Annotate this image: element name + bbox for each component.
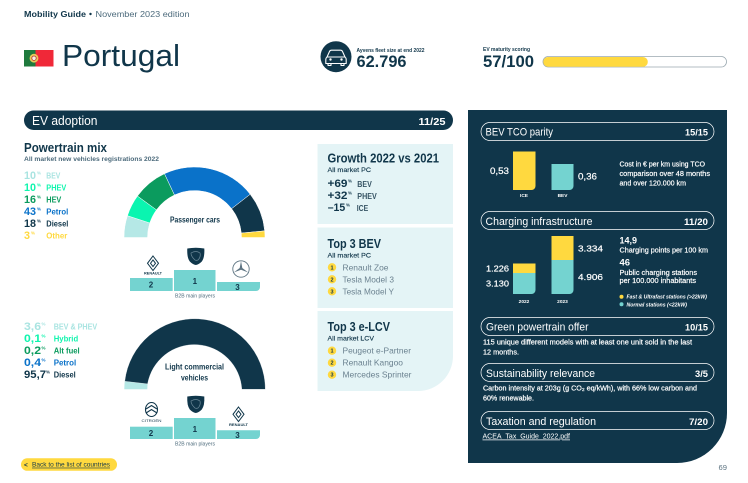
stacked bar chart: charging stations: 1.226 — [486, 264, 509, 274]
fleet size block — [320, 41, 424, 72]
section heading: taxation and regulation: Taxation and regulation — [486, 416, 596, 428]
legend: passenger car powertrain shares — [24, 170, 68, 242]
heading bar: EV adoption — [24, 110, 453, 130]
bar chart: TCO comparison: 0,53 — [490, 166, 509, 176]
section heading: green powertrain offer: 10/15 — [685, 322, 709, 334]
section heading: taxation and regulation: 7/20 — [689, 417, 708, 428]
section heading: green powertrain offer: Green powertrain offer — [486, 322, 589, 334]
section heading: sustainability relevance — [481, 364, 714, 382]
logo: Peugeot — [187, 396, 204, 413]
section heading: charging infrastructure — [481, 212, 714, 230]
scoring label: EV maturity scoring — [483, 47, 530, 53]
logo: Mercedes-Benz — [233, 261, 249, 277]
logo: Renault: RENAULT — [144, 271, 163, 275]
heading bar: EV adoption: 11/25 — [418, 116, 446, 128]
legend: light commercial vehicle powertrain shares: 0,1 — [24, 333, 41, 345]
legend: passenger car powertrain shares: Diesel — [46, 220, 68, 228]
legend: passenger car powertrain shares: % — [37, 182, 41, 188]
panel: growth 2022 vs 2021: All market PC — [328, 167, 371, 174]
growth figures: –15 — [328, 202, 345, 214]
legend: passenger car powertrain shares: BEV — [46, 172, 61, 180]
legend: light commercial vehicle powertrain shares: 3,6 — [24, 321, 41, 333]
heading bar: EV adoption: EV adoption — [32, 113, 98, 128]
ranking list: 2 — [330, 277, 334, 283]
text: green powertrain description — [483, 338, 693, 356]
legend: light commercial vehicle powertrain shares: % — [42, 334, 46, 338]
podium blocks — [130, 418, 260, 439]
ranking list: 1 — [330, 349, 334, 355]
legend: passenger car powertrain shares: 18 — [24, 218, 36, 230]
legend: light commercial vehicle powertrain shares: Petrol — [54, 358, 76, 368]
panel: top 3 BEV: All market PC — [328, 253, 371, 260]
podium ranks: 3 — [235, 431, 240, 440]
stacked bar chart: charging stations: 3.334 — [578, 244, 603, 254]
heading: Powertrain mix: All market new vehicles registrations 2022 — [24, 156, 159, 163]
section heading: taxation and regulation — [481, 412, 714, 430]
ranking list: Renault Zoe — [342, 262, 389, 272]
legend: light commercial vehicle powertrain shares: % — [42, 346, 46, 350]
legend: light commercial vehicle powertrain shares: Diesel — [54, 370, 76, 380]
podium ranks: 3 — [235, 283, 240, 292]
legend: light commercial vehicle powertrain shares: 95,7 — [24, 369, 46, 381]
heading: Powertrain mix — [24, 141, 159, 163]
text: charging figures: 14,9 — [620, 235, 637, 245]
legend: passenger car powertrain shares: % — [37, 170, 41, 176]
growth figures: % — [348, 178, 352, 184]
podium: passenger car B2B players — [130, 248, 260, 300]
growth figures — [328, 178, 377, 214]
ranking list: 1 — [330, 265, 334, 271]
panel: top 3 e-LCV — [318, 311, 453, 391]
chart: passenger cars half donut — [124, 167, 265, 238]
legend: light commercial vehicle powertrain shares: BEV & PHEV — [54, 322, 98, 332]
text: TCO description: Cost in € per km using TCO — [620, 160, 705, 169]
legend: light commercial vehicle powertrain shares: % — [42, 322, 46, 326]
podium ranks: 1 — [193, 425, 198, 434]
growth figures: % — [346, 202, 350, 208]
icon: Portugal flag — [24, 50, 54, 66]
logo: Renault: RENAULT — [229, 423, 249, 427]
growth figures: +32 — [328, 190, 348, 202]
ranking list: Renault Kangoo — [342, 358, 403, 368]
legend: charging station types: Normal stations (<22kW) — [626, 302, 687, 308]
logo: Peugeot — [187, 248, 204, 265]
section heading: sustainability relevance: 3/5 — [695, 369, 709, 380]
text: charging figures — [620, 235, 708, 285]
text: sustainability description — [483, 384, 697, 402]
text: green powertrain description: 115 unique different models with at least one unit sold in the last — [483, 338, 693, 347]
text: charging figures: Public charging stations — [620, 268, 697, 277]
legend: passenger car powertrain shares: % — [31, 230, 35, 236]
panel: scoring details — [468, 110, 727, 463]
growth figures: BEV — [357, 180, 372, 189]
podium ranks: 1 — [193, 277, 198, 286]
text: charging figures: per 100.000 inhabitants — [620, 276, 696, 285]
stacked bar chart: charging stations — [486, 236, 603, 305]
title: country name: Portugal — [62, 38, 180, 73]
text: charging figures: Charging points per 100 km — [620, 246, 708, 255]
logo: Citroen: CITROËN — [142, 419, 162, 423]
podium caption: B2B main players — [175, 294, 215, 300]
chart label: passenger cars: Passenger cars — [170, 216, 220, 224]
growth figures: +69 — [328, 178, 348, 190]
podium caption: B2B main players — [175, 442, 215, 448]
section heading: BEV TCO parity: 15/15 — [685, 128, 709, 138]
legend: light commercial vehicle powertrain shares: % — [46, 370, 50, 374]
ranking list: Tesla Model Y — [342, 286, 394, 296]
bar chart: TCO comparison: 0,36 — [578, 172, 597, 182]
scoring value: 57/100 — [483, 52, 534, 71]
bar chart: TCO comparison — [490, 152, 597, 199]
legend: passenger car powertrain shares: % — [37, 194, 41, 200]
chart label: light commercial vehicles: Light commercial — [165, 362, 224, 372]
text: green powertrain description: 12 months. — [483, 348, 519, 356]
section heading: sustainability relevance: Sustainability relevance — [486, 368, 595, 380]
heading: Powertrain mix: Powertrain mix — [24, 141, 107, 155]
chart label: light commercial vehicles — [165, 362, 224, 382]
EV maturity scoring block — [483, 47, 726, 71]
ranking list — [328, 262, 394, 296]
ranking list: 3 — [330, 373, 334, 379]
legend: passenger car powertrain shares: 3 — [24, 230, 30, 242]
legend: passenger car powertrain shares: HEV — [46, 196, 62, 204]
podium ranks — [149, 425, 240, 440]
growth figures: % — [348, 190, 352, 196]
header: guide edition line: Mobility Guide — [24, 9, 86, 19]
header: guide edition line — [24, 9, 190, 19]
panel: growth 2022 vs 2021 — [318, 144, 453, 224]
legend: light commercial vehicle powertrain shares: % — [42, 358, 46, 362]
legend: passenger car powertrain shares: PHEV — [46, 184, 67, 192]
stacked bar chart: charging stations: 4.906 — [578, 272, 603, 282]
icon: car in circle — [320, 41, 352, 72]
podium blocks — [130, 270, 260, 291]
panel: top 3 e-LCV: Top 3 e-LCV — [328, 320, 391, 334]
ranking list — [328, 346, 412, 380]
panel: growth 2022 vs 2021: Growth 2022 vs 2021 — [328, 152, 439, 166]
section heading: charging infrastructure: 11/20 — [684, 217, 708, 228]
ranking list: Peugeot e-Partner — [342, 346, 411, 356]
legend: passenger car powertrain shares: % — [37, 218, 41, 224]
text: sustainability description: Carbon intensity at 203g (g CO₂ eq/kWh), with 66% low carbon and — [483, 384, 697, 393]
bar chart: TCO comparison: BEV — [558, 193, 568, 199]
section heading: BEV TCO parity: BEV TCO parity — [486, 126, 553, 138]
legend: passenger car powertrain shares: Petrol — [46, 208, 68, 216]
panel: top 3 BEV: Top 3 BEV — [328, 237, 382, 251]
text: sustainability description: 60% renewable. — [483, 393, 534, 402]
fleet size value: 62.796 — [356, 52, 406, 71]
section heading: BEV TCO parity — [481, 122, 714, 140]
legend: passenger car powertrain shares: 43 — [24, 206, 36, 218]
button: back to the list of countries — [21, 458, 117, 471]
panel: top 3 e-LCV: All market LCV — [328, 336, 375, 342]
legend: passenger car powertrain shares: 10 — [24, 182, 36, 194]
text: TCO description: and over 120.000 km — [620, 179, 686, 188]
growth figures: PHEV — [357, 192, 377, 201]
podium ranks: 2 — [149, 280, 154, 290]
stacked bar chart: charging stations: 2022 — [519, 299, 530, 305]
podium ranks — [149, 277, 240, 292]
growth figures: ICE — [357, 204, 369, 213]
stacked bar chart: charging stations: 2023 — [557, 299, 568, 305]
legend: passenger car powertrain shares: Other — [46, 232, 67, 240]
button: back to the list of countries: < — [24, 462, 28, 469]
podium: light commercial vehicle B2B players — [130, 396, 260, 448]
ranking list: 3 — [330, 289, 334, 295]
button: back to the list of countries: Back to the list of countries — [32, 463, 110, 469]
ranking list: Tesla Model 3 — [342, 274, 394, 284]
text: TCO description — [620, 160, 710, 188]
section heading: green powertrain offer — [481, 318, 714, 336]
legend: light commercial vehicle powertrain shares: 0,2 — [24, 345, 41, 357]
fleet size label: Ayvens fleet size at end 2022 — [356, 48, 424, 54]
legend: light commercial vehicle powertrain shares — [24, 321, 98, 381]
text: charging figures: 46 — [620, 258, 630, 268]
chart label: light commercial vehicles: vehicles — [181, 374, 208, 382]
bar chart: TCO comparison: ICE — [520, 193, 529, 199]
section heading: charging infrastructure: Charging infrastructure — [486, 216, 592, 228]
stacked bar chart: charging stations: 3.130 — [486, 279, 509, 289]
link: tax guide pdf: ACEA_Tax_Guide_2022.pdf — [482, 432, 571, 440]
legend: passenger car powertrain shares: 10 — [24, 170, 36, 182]
panel: top 3 BEV — [318, 228, 453, 308]
legend: light commercial vehicle powertrain shares: 0,4 — [24, 357, 42, 369]
legend: charging station types — [620, 295, 707, 308]
legend: charging station types: Fast & Ultrafast stations (>22kW) — [626, 295, 707, 301]
legend: passenger car powertrain shares: % — [37, 206, 41, 212]
text: TCO description: comparison over 48 months — [620, 169, 710, 178]
header: guide edition line: November 2023 edition — [96, 9, 190, 19]
ranking list: 2 — [330, 361, 334, 367]
legend: light commercial vehicle powertrain shares: Hybrid — [54, 334, 78, 344]
legend: passenger car powertrain shares: 16 — [24, 194, 36, 206]
legend: light commercial vehicle powertrain shares: Alt fuel — [54, 346, 80, 356]
chart: light commercial vehicles half donut — [124, 319, 265, 389]
scoring progress bar — [543, 56, 726, 67]
page number: 69 — [718, 465, 727, 472]
ranking list: Mercedes Sprinter — [342, 370, 412, 380]
podium ranks: 2 — [149, 429, 154, 438]
